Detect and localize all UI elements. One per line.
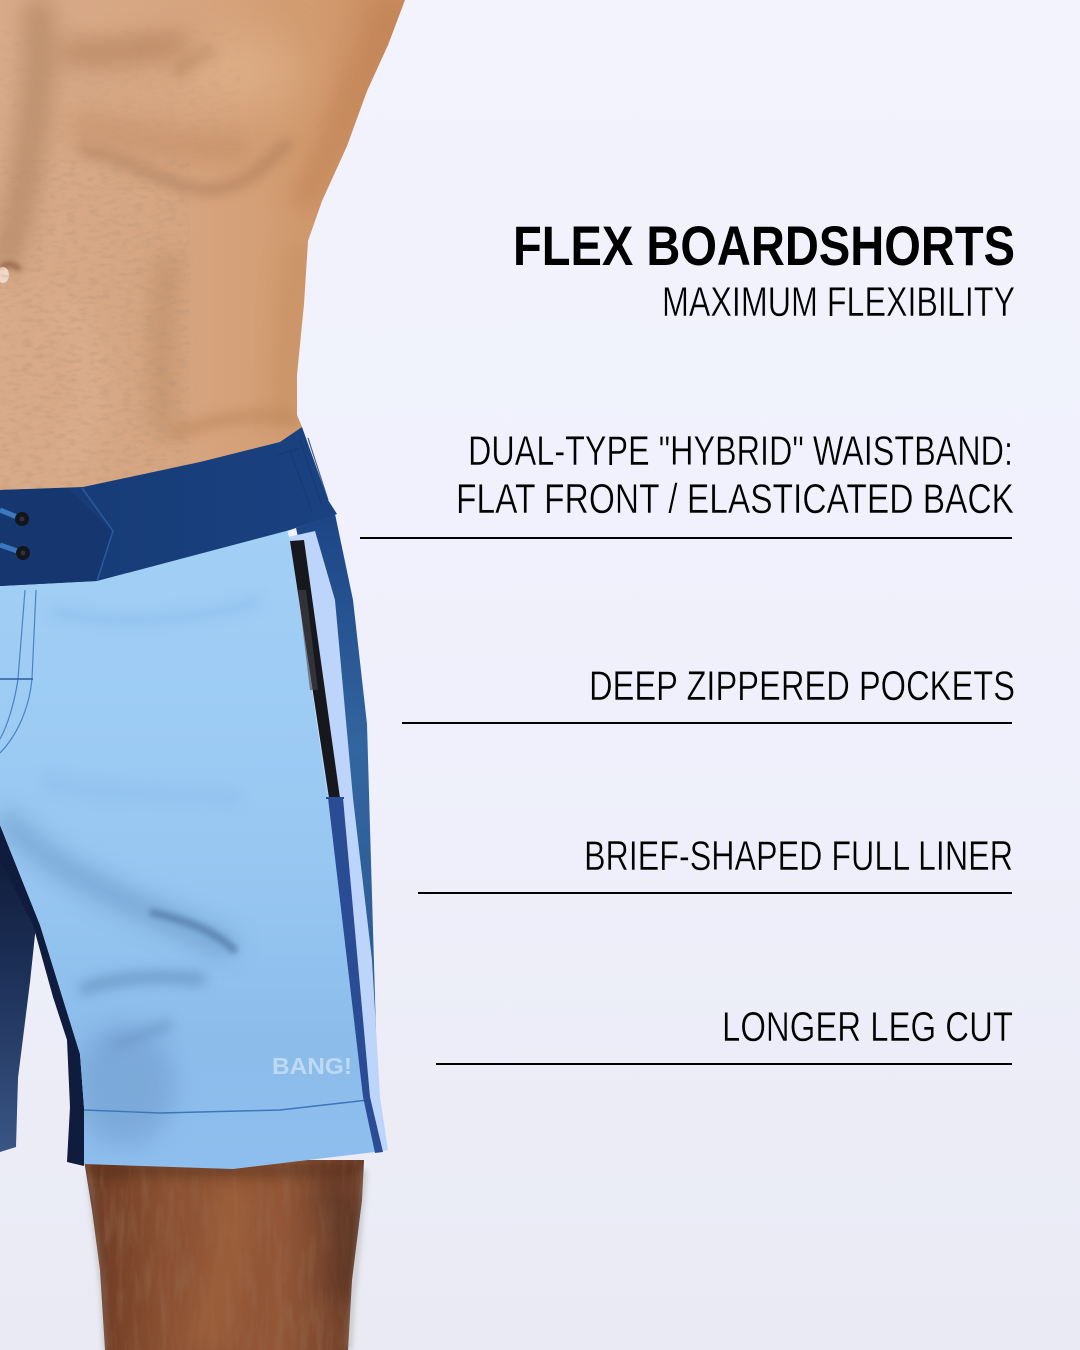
main light blue panel [0, 529, 375, 1169]
feature: hybrid waistband [360, 427, 1014, 539]
drawstring and eyelets [0, 510, 30, 560]
photo: model torso [0, 0, 405, 600]
photo: boardshorts [0, 427, 388, 1169]
inner dark leg panel [0, 825, 84, 1166]
lavender side stripe [288, 531, 388, 1152]
back leg of shorts [0, 840, 36, 1152]
waistband elastic gathers [276, 438, 328, 512]
zipper [290, 540, 340, 798]
brand mark on leg: BANG! [272, 1053, 352, 1079]
waistband front tab [0, 488, 113, 586]
dark blue side panel [296, 514, 378, 1100]
fly stitching [0, 590, 36, 753]
waistband [0, 427, 337, 586]
photo: thigh [84, 1160, 364, 1350]
navy stripe under pocket [328, 798, 383, 1153]
hem stitch [84, 1100, 368, 1113]
